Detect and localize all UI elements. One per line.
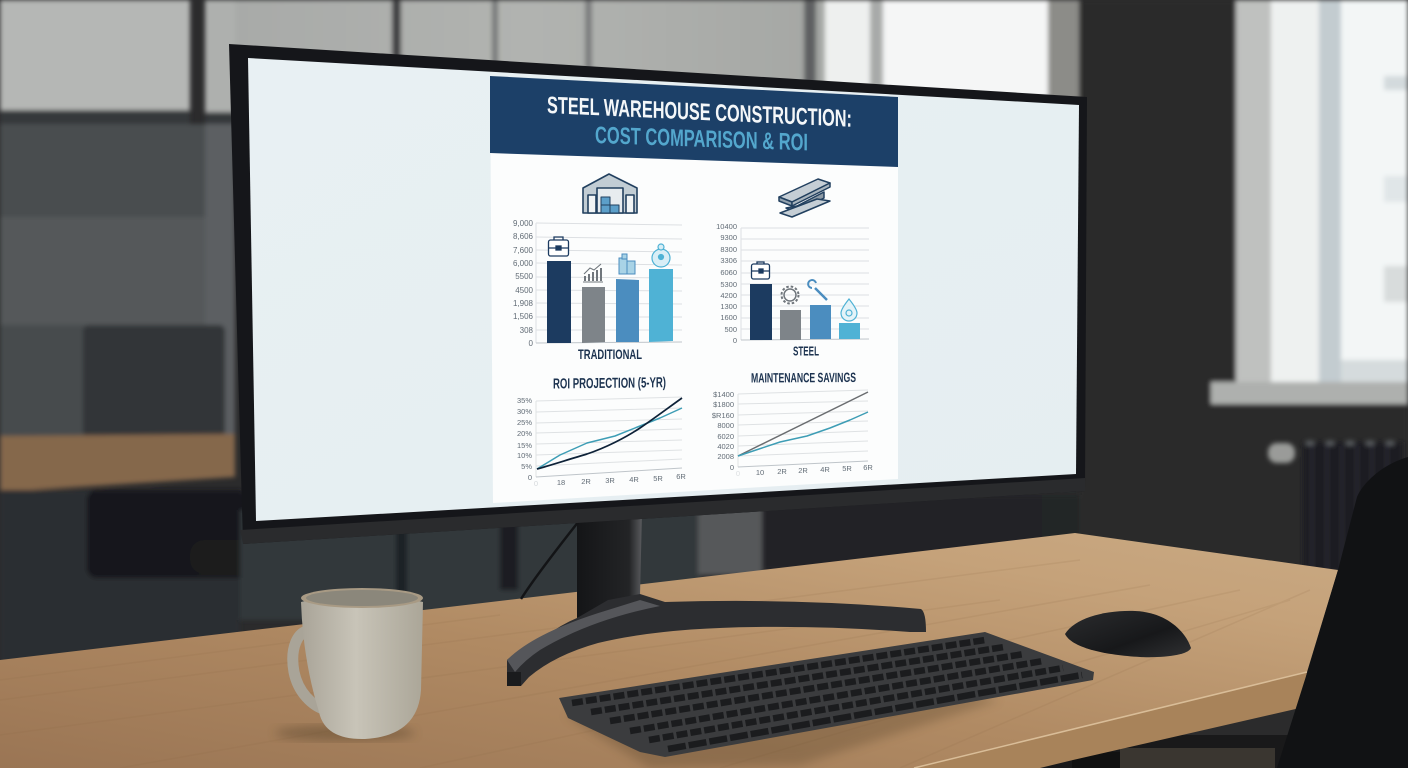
x axis labels: 2R — [777, 467, 787, 476]
y axis labels: 25% — [517, 418, 532, 427]
x axis labels: 4R — [629, 475, 639, 484]
x axis labels: 6R — [863, 463, 873, 472]
x axis labels: 2R — [581, 477, 591, 486]
y axis labels: 4200 — [720, 291, 737, 300]
gray line — [738, 392, 868, 456]
icon: buildings — [619, 254, 635, 274]
y axis labels: 0 — [528, 473, 532, 482]
y axis labels: $R160 — [712, 411, 734, 420]
chart title: MAINTENANCE SAVINGS — [751, 370, 856, 385]
y axis labels: 500 — [724, 325, 737, 334]
y axis labels: $1800 — [713, 400, 734, 409]
icon: steel beam — [779, 179, 830, 217]
mug handle — [293, 630, 326, 710]
icon: briefcase — [548, 237, 568, 256]
y axis labels: 3306 — [720, 256, 737, 265]
label: traditional: TRADITIONAL — [578, 346, 642, 362]
header banner — [490, 76, 898, 167]
mug body — [301, 594, 423, 739]
bars — [547, 261, 673, 343]
y axis labels: 5500 — [515, 272, 534, 281]
y axis labels: 8300 — [720, 245, 737, 254]
y axis labels: 1,908 — [513, 299, 534, 308]
bezel — [229, 44, 1087, 544]
y axis labels: 5300 — [720, 280, 737, 289]
line chart: ROI projection — [517, 375, 686, 488]
y axis labels — [716, 222, 737, 345]
y axis labels: 4500 — [515, 286, 534, 295]
title line 1: STEEL WAREHOUSE CONSTRUCTION: — [547, 92, 852, 133]
keyboard — [559, 632, 1094, 768]
panel: infographic — [490, 76, 898, 503]
x axis labels: 3R — [605, 476, 615, 485]
y axis labels: 4020 — [717, 442, 734, 451]
bar chart: steel — [716, 222, 869, 358]
icon: money bag — [652, 244, 670, 267]
y axis labels: 6,000 — [513, 259, 534, 268]
y axis labels: 10% — [517, 451, 532, 460]
x axis labels: 10 — [756, 468, 764, 477]
chart title: ROI PROJECTION (5-YR) — [553, 375, 666, 392]
mouse — [1065, 611, 1191, 657]
y axis labels: 9,000 — [513, 219, 534, 228]
stand base — [507, 594, 926, 686]
y axis labels: 20% — [517, 429, 532, 438]
y axis labels — [712, 390, 734, 472]
x axis labels: 4R — [820, 465, 830, 474]
under desk shadow — [1000, 735, 1300, 768]
y axis labels: 1600 — [720, 313, 737, 322]
x axis labels: 0 — [534, 479, 538, 488]
x axis labels: 18 — [557, 478, 565, 487]
screen — [248, 58, 1079, 521]
y axis labels: 15% — [517, 441, 532, 450]
y axis labels: 35% — [517, 396, 532, 405]
y axis labels: 1,506 — [513, 312, 534, 321]
bar chart: traditional — [513, 219, 682, 362]
icon: water drop — [841, 299, 857, 321]
y axis labels: 7,600 — [513, 246, 534, 255]
icon: gear — [782, 286, 798, 304]
y axis labels: $1400 — [713, 390, 734, 399]
coffee mug — [275, 588, 423, 741]
icon: wrench — [808, 280, 827, 300]
title line 2: COST COMPARISON & ROI — [595, 122, 808, 156]
stand column — [577, 512, 642, 618]
x axis labels — [736, 463, 873, 478]
y axis labels: 10400 — [716, 222, 737, 231]
x axis labels — [534, 472, 686, 488]
desk top — [0, 533, 1338, 768]
cable — [521, 521, 579, 599]
teal line — [738, 412, 868, 456]
office chair — [1277, 457, 1408, 768]
monitor stand — [507, 512, 926, 686]
bars — [750, 284, 860, 340]
teal line — [537, 408, 682, 469]
x axis labels: 2R — [798, 466, 808, 475]
y axis labels: 308 — [520, 326, 534, 335]
x axis labels: 0 — [736, 469, 740, 478]
line chart: maintenance savings — [712, 370, 873, 478]
y axis labels: 0 — [730, 463, 734, 472]
x axis labels: 6R — [676, 472, 686, 481]
y axis labels: 6060 — [720, 268, 737, 277]
y axis labels: 5% — [521, 462, 532, 471]
navy curve — [537, 398, 682, 469]
y axis labels: 1300 — [720, 302, 737, 311]
y axis labels: 8000 — [717, 421, 734, 430]
y axis labels — [517, 396, 532, 482]
y axis labels: 30% — [517, 407, 532, 416]
y axis labels: 6020 — [717, 432, 734, 441]
y axis labels: 8,606 — [513, 232, 534, 241]
radiator — [1268, 442, 1403, 572]
desk front edge — [914, 672, 1307, 768]
label: steel: STEEL — [793, 344, 819, 358]
y axis labels: 0 — [733, 336, 737, 345]
y axis labels: 2008 — [717, 452, 734, 461]
y axis labels: 0 — [529, 339, 534, 348]
icon: briefcase — [752, 262, 770, 279]
panel: white page — [490, 76, 898, 503]
monitor — [229, 44, 1087, 544]
keys — [572, 640, 1082, 749]
desk — [0, 533, 1338, 768]
y axis labels: 9300 — [720, 233, 737, 242]
x axis labels: 5R — [842, 464, 852, 473]
icon: growth chart — [583, 264, 603, 282]
icon: warehouse — [583, 174, 637, 213]
y axis labels — [513, 219, 534, 348]
x axis labels: 5R — [653, 474, 663, 483]
